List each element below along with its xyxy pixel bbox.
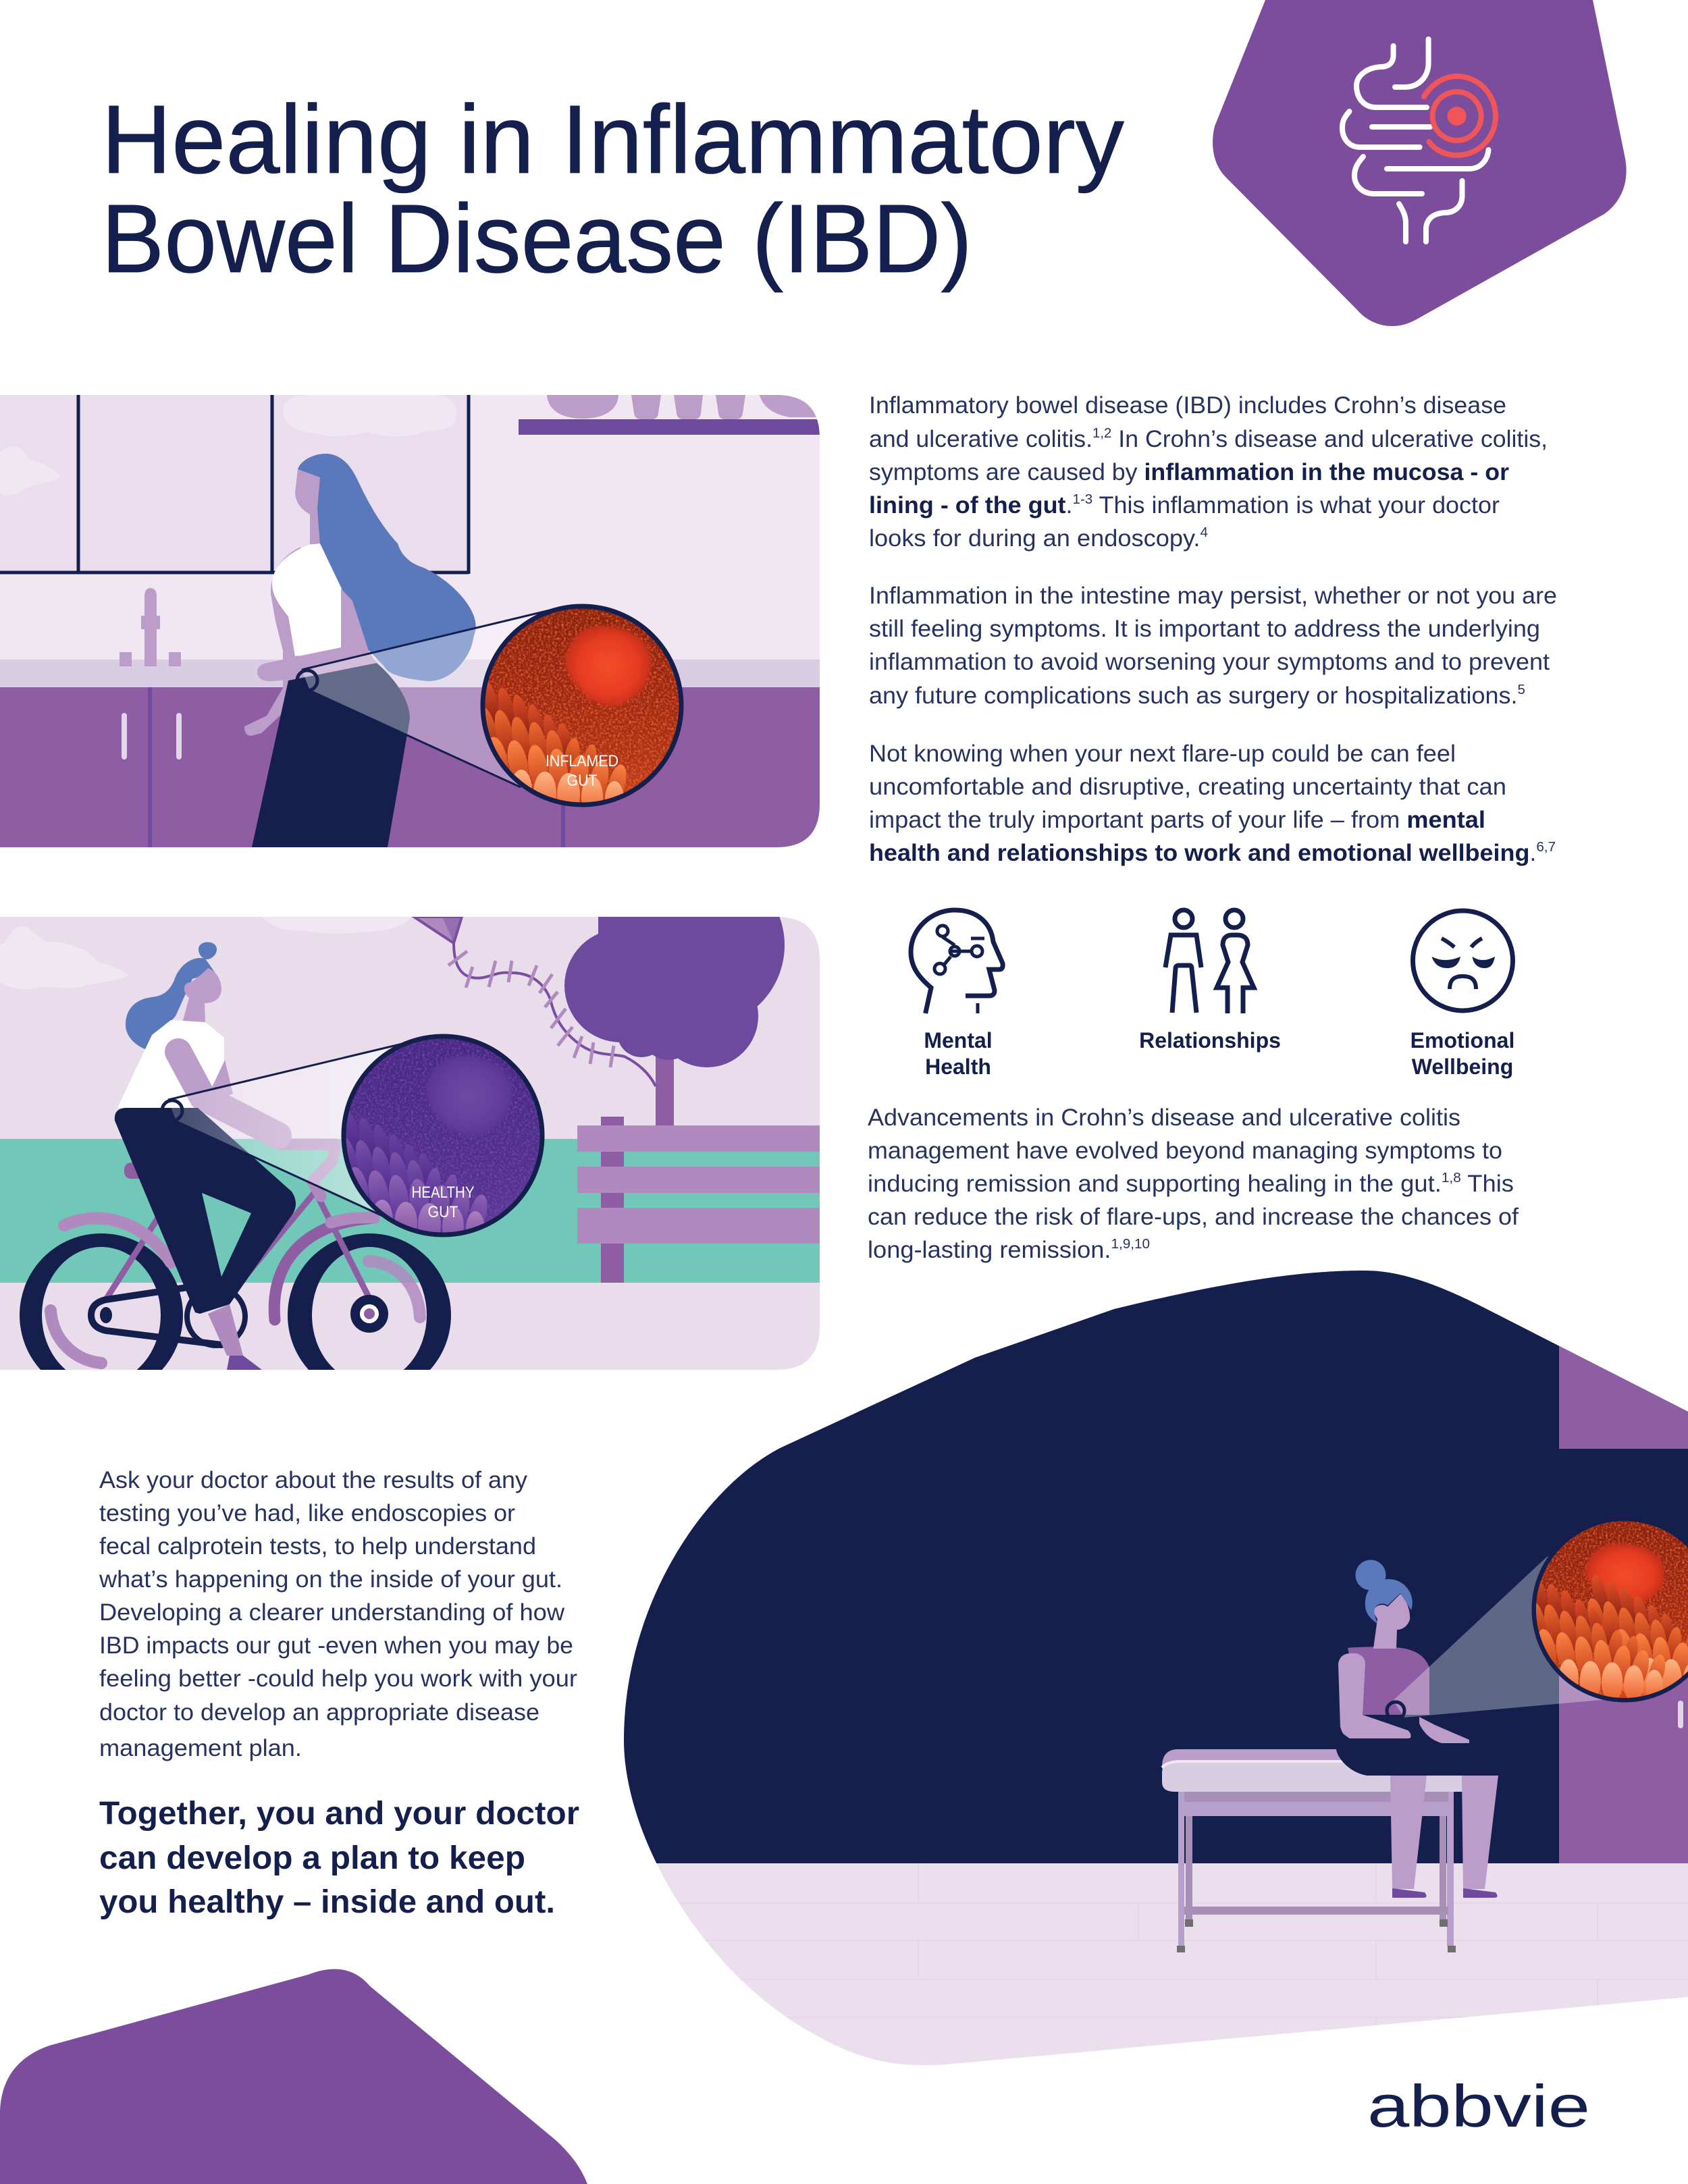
body text: ask your doctor: fecal calprotein tests, to help understand xyxy=(99,1533,536,1560)
body text: intro paragraph: and ulcerative colitis. xyxy=(869,426,1088,452)
body text: intro paragraph: 1,2 xyxy=(1092,426,1111,441)
panel: kitchen scene with inflamed gut xyxy=(0,395,820,847)
body text: uncertainty paragraph: 6,7 xyxy=(1536,840,1556,855)
title xyxy=(101,85,1124,293)
label: relationships: Relationships xyxy=(1139,1028,1281,1053)
body text: intro paragraph: looks for during an endoscopy. xyxy=(869,525,1189,552)
label: inflamed gut xyxy=(546,752,618,790)
body text: advancements paragraph: 1,8 xyxy=(1442,1171,1461,1186)
title: Bowel Disease (IBD) xyxy=(101,184,972,293)
faucet xyxy=(120,588,181,666)
body text: intro paragraph: lining - of the gut. xyxy=(869,492,1072,518)
body text: ask your doctor: testing you’ve had, like endoscopies or xyxy=(99,1500,515,1526)
body text: advancements paragraph: long-lasting remission. xyxy=(868,1237,1103,1263)
icon: intestine in purple pentagon xyxy=(1213,0,1627,326)
floor xyxy=(608,1863,1688,2079)
shelf with dishes xyxy=(519,395,820,435)
body text: ask your doctor: IBD impacts our gut -even when you may be xyxy=(99,1632,573,1659)
body text: ask your doctor: Ask your doctor about the results of any xyxy=(99,1467,528,1493)
woman seated xyxy=(1336,1560,1502,1898)
body text: persistent inflammation paragraph: still feeling symptoms. It is important to address the underlying xyxy=(869,616,1540,642)
body text: ask your doctor xyxy=(99,1467,577,1761)
body text: persistent inflammation paragraph: inflammation to avoid worsening your symptoms and to prevent xyxy=(869,649,1550,675)
call to action xyxy=(99,1796,579,1920)
body text: ask your doctor: doctor to develop an appropriate disease xyxy=(99,1699,539,1726)
body text: persistent inflammation paragraph: Inflammation in the intestine may persist, whether or not you are xyxy=(869,583,1557,609)
body text: ask your doctor: management plan. xyxy=(99,1735,302,1761)
kite and tail xyxy=(414,917,656,1086)
body text: advancements paragraph: This xyxy=(1461,1171,1514,1197)
body text: intro paragraph: Inflammatory bowel disease (IBD) includes Crohn’s disease xyxy=(869,392,1506,419)
logo: abbvie: abbvie xyxy=(1367,2073,1590,2139)
body text: advancements paragraph xyxy=(868,1104,1519,1263)
door and wall panels xyxy=(1559,1283,1688,1863)
countertop xyxy=(0,660,820,687)
icon: mental health xyxy=(911,910,1003,1013)
body text: advancements paragraph: inducing remission and supporting healing in the gut. xyxy=(868,1171,1419,1197)
label: mental health xyxy=(924,1028,993,1079)
body text: ask your doctor: feeling better -could help you work with your xyxy=(99,1666,577,1692)
magnifier cone xyxy=(297,609,555,787)
title: Healing in Inflammatory xyxy=(101,85,1124,194)
icon: emotional wellbeing xyxy=(1413,911,1512,1011)
exam table xyxy=(1162,1749,1463,1952)
body text: advancements paragraph: 1,9,10 xyxy=(1111,1237,1150,1252)
panel: doctor's office scene xyxy=(608,1262,1688,2079)
body text: intro paragraph: 1-3 xyxy=(1073,492,1092,507)
label: healthy gut: HEALTHY xyxy=(412,1183,474,1202)
icon: relationships xyxy=(1165,910,1254,1013)
clouds xyxy=(0,917,411,989)
woman standing xyxy=(244,454,476,847)
window xyxy=(0,395,469,574)
label: mental health: Mental xyxy=(924,1028,993,1053)
body text: advancements paragraph: Advancements in Crohn’s disease and ulcerative colitis xyxy=(868,1104,1460,1131)
body text: ask your doctor: what’s happening on the inside of your gut. xyxy=(99,1566,562,1593)
body text: persistent inflammation paragraph: 5 xyxy=(1518,683,1525,697)
tree xyxy=(564,917,785,1125)
call to action: you healthy – inside and out. xyxy=(99,1884,555,1920)
label: emotional wellbeing xyxy=(1410,1028,1514,1079)
body text: intro paragraph: symptoms are caused by inflammation in the mucosa - or xyxy=(869,459,1509,485)
green field xyxy=(0,1139,820,1283)
body text: advancements paragraph: management have evolved beyond managing symptoms to xyxy=(868,1138,1502,1164)
body text: intro paragraph xyxy=(869,392,1548,552)
bicycle xyxy=(20,1144,451,1397)
label: healthy gut xyxy=(412,1183,474,1221)
body text: intro paragraph: 4 xyxy=(1200,525,1208,540)
decorative purple pentagon bottom left xyxy=(0,1969,587,2184)
call to action: can develop a plan to keep xyxy=(99,1840,525,1876)
body text: uncertainty paragraph: uncomfortable and disruptive, creating uncertainty that can xyxy=(869,774,1506,800)
body text: uncertainty paragraph: impact the truly important parts of your life – from mental xyxy=(869,807,1485,833)
body text: uncertainty paragraph: Not knowing when your next flare-up could be can feel xyxy=(869,741,1456,767)
cabinets xyxy=(0,687,820,847)
body text: uncertainty paragraph xyxy=(869,741,1556,866)
label: emotional wellbeing: Emotional xyxy=(1410,1028,1514,1053)
magnifier cone xyxy=(1387,1556,1616,1720)
call to action: Together, you and your doctor xyxy=(99,1796,579,1832)
gut photo: inflamed close-up xyxy=(1525,1519,1688,1703)
label: inflamed gut: GUT xyxy=(567,772,598,790)
label: emotional wellbeing: Wellbeing xyxy=(1412,1055,1513,1079)
label: inflamed gut: INFLAMED xyxy=(546,752,618,770)
body text: persistent inflammation paragraph: any future complications such as surgery or hospitalizations. xyxy=(869,683,1500,709)
label: healthy gut: GUT xyxy=(428,1203,458,1221)
magnifier cone xyxy=(162,1041,414,1218)
park bench xyxy=(577,1117,820,1283)
body text: uncertainty paragraph: health and relationships to work and emotional wellbeing . xyxy=(869,840,1536,866)
body text: ask your doctor: Developing a clearer understanding of how xyxy=(99,1599,565,1626)
woman cycling xyxy=(115,942,296,1370)
body text: intro paragraph: In Crohn’s disease and ulcerative colitis, xyxy=(1111,426,1548,452)
body text: persistent inflammation paragraph xyxy=(869,583,1557,709)
body text: intro paragraph: This inflammation is what your doctor xyxy=(1092,492,1500,518)
label: mental health: Health xyxy=(925,1055,991,1079)
panel: cycling scene with healthy gut xyxy=(0,917,820,1370)
body text: advancements paragraph: can reduce the risk of flare-ups, and increase the chances of xyxy=(868,1204,1519,1230)
gut photo: inflamed xyxy=(474,606,681,817)
gut photo: healthy xyxy=(335,1036,542,1247)
